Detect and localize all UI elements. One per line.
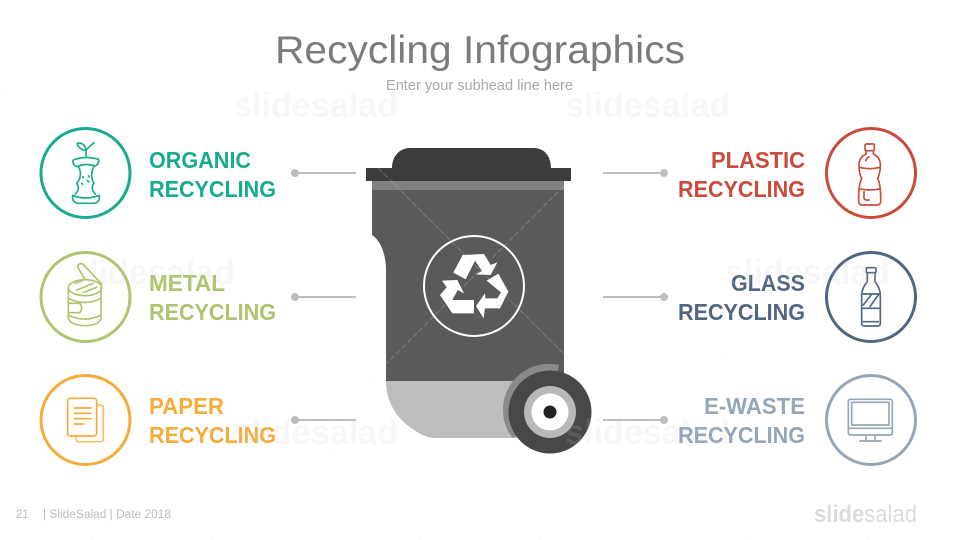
watermarks: slidesalad (233, 413, 398, 452)
label: plastic: PLASTIC (711, 147, 805, 173)
watermarks: slidesalad (725, 253, 890, 292)
item: e-waste recycling (678, 376, 916, 464)
label: e-waste (678, 393, 805, 448)
item: metal recycling (41, 252, 276, 342)
watermarks (70, 86, 890, 452)
label: paper: PAPER (149, 393, 224, 419)
label: glass (678, 270, 805, 325)
label: paper (149, 393, 276, 448)
wheel arch (503, 364, 559, 438)
label: metal (149, 270, 276, 325)
recycling bin (366, 148, 592, 454)
label: organic (149, 147, 276, 202)
footer page info: | SlideSalad | Date 2018 (43, 509, 171, 521)
icon: paper documents (68, 398, 103, 442)
label: e-waste: E-WASTE (704, 393, 805, 419)
label: paper: RECYCLING (149, 422, 276, 448)
item: plastic recycling (678, 128, 916, 218)
icon circle: plastic (826, 128, 916, 218)
item: glass recycling (678, 252, 916, 342)
icon circle: organic (41, 128, 130, 218)
label: glass: RECYCLING (678, 299, 805, 325)
icon circle: metal (41, 252, 130, 342)
icon circle: glass (826, 252, 916, 342)
icon: glass bottle (862, 268, 880, 326)
label: organic: ORGANIC (149, 147, 251, 173)
recycling symbol (424, 236, 524, 336)
icon circle: e-waste (826, 376, 916, 464)
label: e-waste: RECYCLING (678, 422, 805, 448)
icon: computer monitor (848, 399, 892, 441)
label: glass: GLASS (731, 270, 805, 296)
item: paper recycling (41, 376, 276, 464)
bin lower panel (386, 381, 520, 438)
label: metal: METAL (149, 270, 225, 296)
icon: apple core (73, 143, 99, 203)
item: organic recycling (41, 128, 276, 218)
subtitle: Enter your subhead line here (386, 78, 573, 94)
icon: tin can (68, 264, 102, 326)
watermarks: slidesalad (565, 86, 730, 125)
watermarks: slidesalad (565, 413, 730, 452)
label: metal: RECYCLING (149, 299, 276, 325)
icon: plastic bottle (859, 144, 881, 205)
title: Recycling Infographics (275, 29, 685, 72)
wheel (508, 370, 592, 454)
label: plastic (678, 147, 805, 202)
watermarks: slidesalad (70, 253, 235, 292)
connector lines (291, 169, 668, 424)
label: plastic: RECYCLING (678, 176, 805, 202)
icon circle: paper (41, 376, 130, 464)
footer logo: slidesalad (814, 501, 917, 528)
bin rim shadow (372, 181, 564, 190)
label: organic: RECYCLING (149, 176, 276, 202)
bin body (372, 181, 564, 381)
bin lid (366, 148, 571, 181)
watermarks: slidesalad (233, 86, 398, 125)
footer page info: 21 (16, 509, 29, 521)
